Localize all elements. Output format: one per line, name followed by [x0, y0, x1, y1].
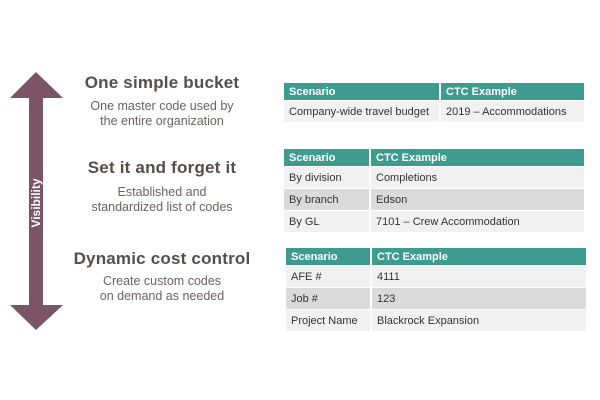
- table 2: By GL: [289, 216, 320, 228]
- table 3: Blackrock Expansion: [377, 314, 479, 326]
- table 2: Scenario: [289, 152, 335, 164]
- table 3: CTC Example: [377, 250, 448, 262]
- table 2: Completions: [376, 172, 437, 184]
- label: Visibility: Visibility: [29, 178, 43, 228]
- table 2: By branch: [289, 194, 339, 206]
- table 2: [284, 149, 584, 232]
- text: set it: Established and: [118, 185, 206, 199]
- table 3: Project Name: [291, 314, 358, 326]
- text: dynamic: [100, 274, 224, 303]
- text: set it: standardized list of codes: [91, 200, 233, 214]
- heading: One simple bucket: One simple bucket: [85, 73, 239, 92]
- text: one simple bucket: One master code used by: [90, 99, 234, 113]
- table 1: Company-wide travel budget: [289, 106, 429, 118]
- text: set it: [91, 185, 233, 214]
- table 1: [284, 83, 584, 122]
- text: dynamic: Create custom codes: [103, 274, 221, 288]
- table 3: AFE #: [291, 270, 322, 282]
- table 1: Scenario: [289, 86, 335, 98]
- arrow: visibility: [10, 72, 63, 330]
- table 2: 7101 – Crew Accommodation: [376, 216, 520, 228]
- table 3: Job #: [291, 292, 318, 304]
- table 2: By division: [289, 172, 342, 184]
- text: one simple bucket: the entire organization: [100, 114, 224, 128]
- table 3: Scenario: [291, 250, 337, 262]
- table 2: Edson: [376, 194, 407, 206]
- table 2: CTC Example: [376, 152, 447, 164]
- text: dynamic: on demand as needed: [100, 289, 224, 303]
- table 3: 123: [377, 292, 395, 304]
- table 3: 4111: [377, 270, 400, 282]
- table 1: CTC Example: [446, 86, 517, 98]
- text: one simple bucket: [90, 99, 234, 128]
- heading: Set it and forget it: Set it and forget it: [88, 158, 236, 177]
- table 3: [286, 248, 586, 331]
- table 1: 2019 – Accommodations: [446, 106, 566, 118]
- heading: Dynamic cost control: Dynamic cost control: [74, 249, 250, 268]
